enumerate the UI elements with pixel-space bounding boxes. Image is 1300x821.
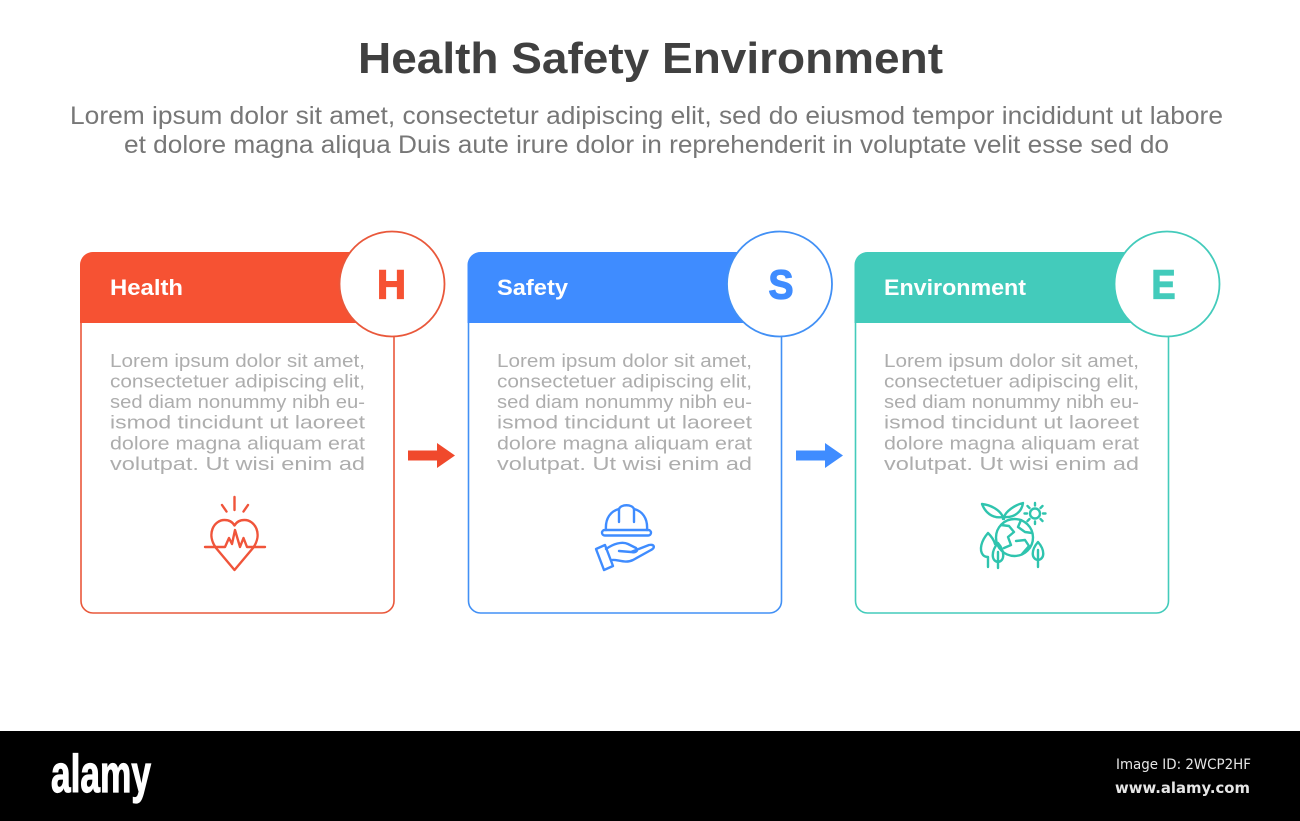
environment body text: [884, 351, 1139, 474]
panel: environment: [854, 232, 1220, 613]
icon: heart with pulse: [205, 497, 265, 570]
website: www.alamy.com: [1115, 779, 1250, 797]
panel: health: [80, 232, 444, 613]
environment heading: Environment: [884, 275, 1027, 300]
health body text: [110, 351, 365, 474]
safety heading: Safety: [497, 275, 568, 300]
safety body text: Lorem ipsum dolor sit amet,: [497, 351, 752, 371]
environment body text: dolore magna aliquam erat: [884, 434, 1139, 454]
health body text: volutpat. Ut wisi enim ad: [110, 454, 365, 474]
footer watermark bar: [0, 731, 1300, 821]
health header bar: [80, 252, 395, 323]
health body text: dolore magna aliquam erat: [110, 434, 365, 454]
safety body text: volutpat. Ut wisi enim ad: [497, 454, 752, 474]
health card outline: [81, 253, 394, 613]
health letter badge: [340, 232, 444, 336]
health body text: Lorem ipsum dolor sit amet,: [110, 351, 365, 371]
environment header bar: [854, 252, 1169, 323]
environment body text: ismod tincidunt ut laoreet: [884, 412, 1139, 432]
icon: globe with leaves and sun: [981, 503, 1046, 568]
environment body text: Lorem ipsum dolor sit amet,: [884, 351, 1139, 371]
safety body text: dolore magna aliquam erat: [497, 434, 752, 454]
panel: safety: [468, 232, 832, 613]
environment body text: sed diam nonummy nibh eu-: [884, 392, 1139, 412]
health letter badge: H: [377, 262, 406, 308]
environment card outline: [856, 253, 1168, 613]
safety header bar: [468, 252, 782, 323]
environment letter badge: E: [1152, 262, 1176, 308]
environment body text: volutpat. Ut wisi enim ad: [884, 454, 1139, 474]
health body text: ismod tincidunt ut laoreet: [110, 412, 365, 432]
icon: helmet on hand: [596, 505, 654, 570]
environment letter badge: [1114, 232, 1220, 336]
image id: Image ID: 2WCP2HF: [1116, 757, 1251, 773]
environment body text: consectetuer adipiscing elit,: [884, 372, 1139, 392]
safety body text: ismod tincidunt ut laoreet: [497, 412, 752, 432]
safety body text: sed diam nonummy nibh eu-: [497, 392, 752, 412]
subtitle text: et dolore magna aliqua Duis aute irure dolor in reprehenderit in voluptate velit esse sed do: [124, 131, 1169, 159]
safety letter badge: S: [768, 262, 794, 308]
safety letter badge: [727, 232, 832, 336]
subtitle text: Lorem ipsum dolor sit amet, consectetur adipiscing elit, sed do eiusmod tempor incididunt ut labore: [70, 102, 1223, 130]
arrow: health to safety: [408, 443, 455, 468]
title: Health Safety Environment: [358, 34, 943, 83]
arrow: safety to environment: [796, 443, 843, 468]
health body text: consectetuer adipiscing elit,: [110, 372, 365, 392]
health body text: sed diam nonummy nibh eu-: [110, 392, 365, 412]
health heading: Health: [110, 275, 183, 300]
safety card outline: [468, 253, 782, 613]
subtitle text: [70, 102, 1223, 159]
safety body text: consectetuer adipiscing elit,: [497, 372, 752, 392]
alamy logo: alamy: [51, 745, 151, 804]
safety body text: [497, 351, 752, 474]
